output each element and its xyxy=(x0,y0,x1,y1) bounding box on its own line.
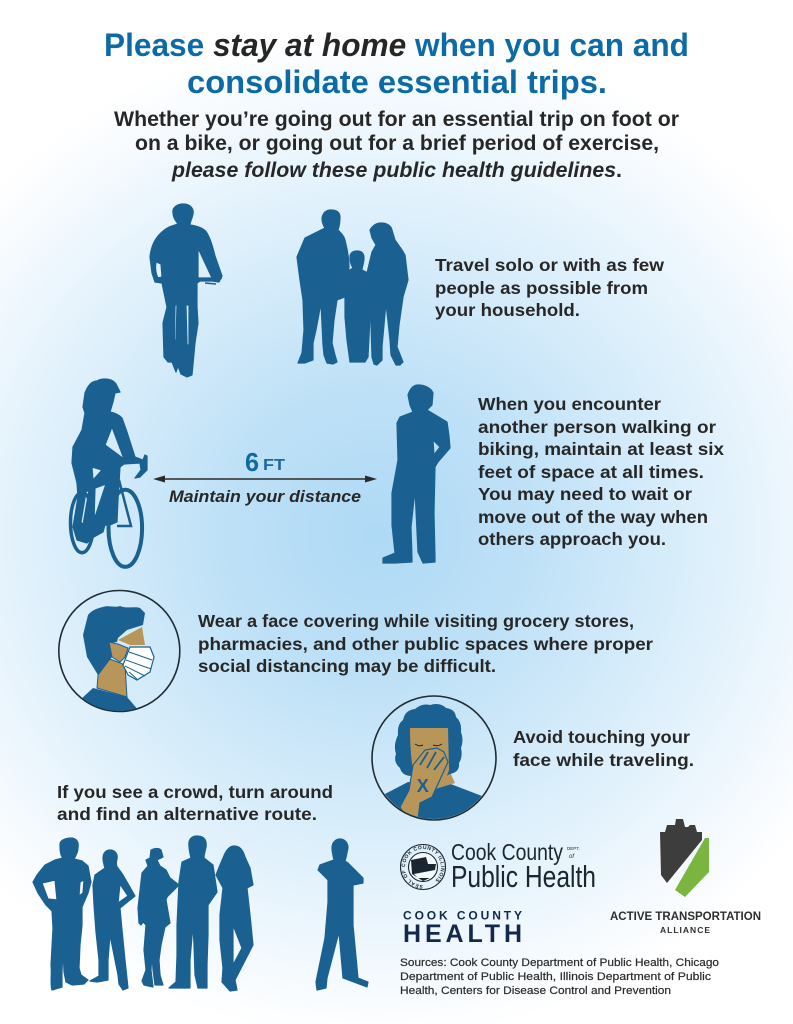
title xyxy=(104,27,689,100)
text: six feet guidance xyxy=(478,394,724,549)
logo: active transportation alliance: ALLIANCE xyxy=(660,925,710,935)
text: travel solo: your household. xyxy=(435,300,580,320)
text: avoid touching xyxy=(513,727,694,770)
icon: family silhouette xyxy=(297,210,408,365)
text: six feet guidance: When you encounter xyxy=(478,394,661,414)
text: crowd advice: and find an alternative route. xyxy=(57,804,317,824)
logo: cook county public health: of xyxy=(569,854,575,860)
icon: hand over face xyxy=(372,696,496,825)
logo: active transportation alliance xyxy=(610,819,761,935)
icon: hand over face: X xyxy=(417,776,429,796)
arrow: six feet xyxy=(153,476,377,482)
logo: active transportation alliance: ACTIVE TRANSPORTATION xyxy=(610,911,761,923)
icon: cyclist front view xyxy=(150,204,222,377)
logo: cook county health: COOK COUNTY xyxy=(403,908,522,922)
icon: shield xyxy=(660,819,709,897)
logo: cook county public health xyxy=(400,839,596,894)
subtitle text xyxy=(114,108,679,182)
distance marker xyxy=(153,447,377,506)
text: six feet guidance: feet of space at all times. xyxy=(478,462,704,482)
icon: person wearing mask xyxy=(59,590,180,714)
label: 6 ft: FT xyxy=(263,457,285,474)
sources xyxy=(400,957,719,997)
text: six feet guidance: others approach you. xyxy=(478,529,666,549)
subtitle text: please follow these public health guidelines . xyxy=(171,159,622,182)
title: Please stay at home when you can and xyxy=(104,27,689,63)
subtitle text: Whether you’re going out for an essential trip on foot or xyxy=(114,108,679,131)
sources: Department of Public Health, Illinois Department of Public xyxy=(400,971,712,983)
text: six feet guidance: You may need to wait or xyxy=(478,484,692,504)
text: face covering: pharmacies, and other public spaces where proper xyxy=(198,634,653,654)
logo: cook county public health: Public Health xyxy=(451,859,596,894)
icon: county seal: SEAL OF COOK COUNTY ILLINOIS xyxy=(402,846,444,888)
text: face covering: social distancing may be difficult. xyxy=(198,656,496,676)
text: crowd advice: If you see a crowd, turn around xyxy=(57,782,333,802)
label: 6 ft: 6 xyxy=(245,447,259,477)
title: consolidate essential trips. xyxy=(187,64,607,100)
text: avoid touching: Avoid touching your xyxy=(513,727,690,747)
icon: cyclist side view xyxy=(70,379,147,567)
text: six feet guidance: move out of the way when xyxy=(478,507,708,527)
text: travel solo: people as possible from xyxy=(435,278,648,298)
label: 6 ft xyxy=(245,447,285,477)
text: travel solo: Travel solo or with as few xyxy=(435,255,664,275)
sources: Sources: Cook County Department of Public Health, Chicago xyxy=(400,957,719,969)
text: crowd advice xyxy=(57,782,333,824)
text: six feet guidance: biking, maintain at least six xyxy=(478,439,724,459)
subtitle text: on a bike, or going out for a brief period of exercise, xyxy=(135,132,659,155)
logo: cook county public health: DEPT. xyxy=(567,846,580,851)
wordmark: Cook County xyxy=(451,839,563,865)
text: six feet guidance: another person walking or xyxy=(478,417,716,437)
text: travel solo xyxy=(435,255,664,320)
sources: Health, Centers for Disease Control and Prevention xyxy=(400,985,671,997)
text: avoid touching: face while traveling. xyxy=(513,750,694,770)
logo: cook county health: HEALTH xyxy=(403,920,522,948)
label: maintain your distance: Maintain your distance xyxy=(169,487,361,506)
text: face covering: Wear a face covering while visiting grocery stores, xyxy=(198,611,634,631)
text: face covering xyxy=(198,611,653,676)
icon: crowd silhouettes xyxy=(33,836,368,991)
icon: standing man xyxy=(383,385,450,563)
